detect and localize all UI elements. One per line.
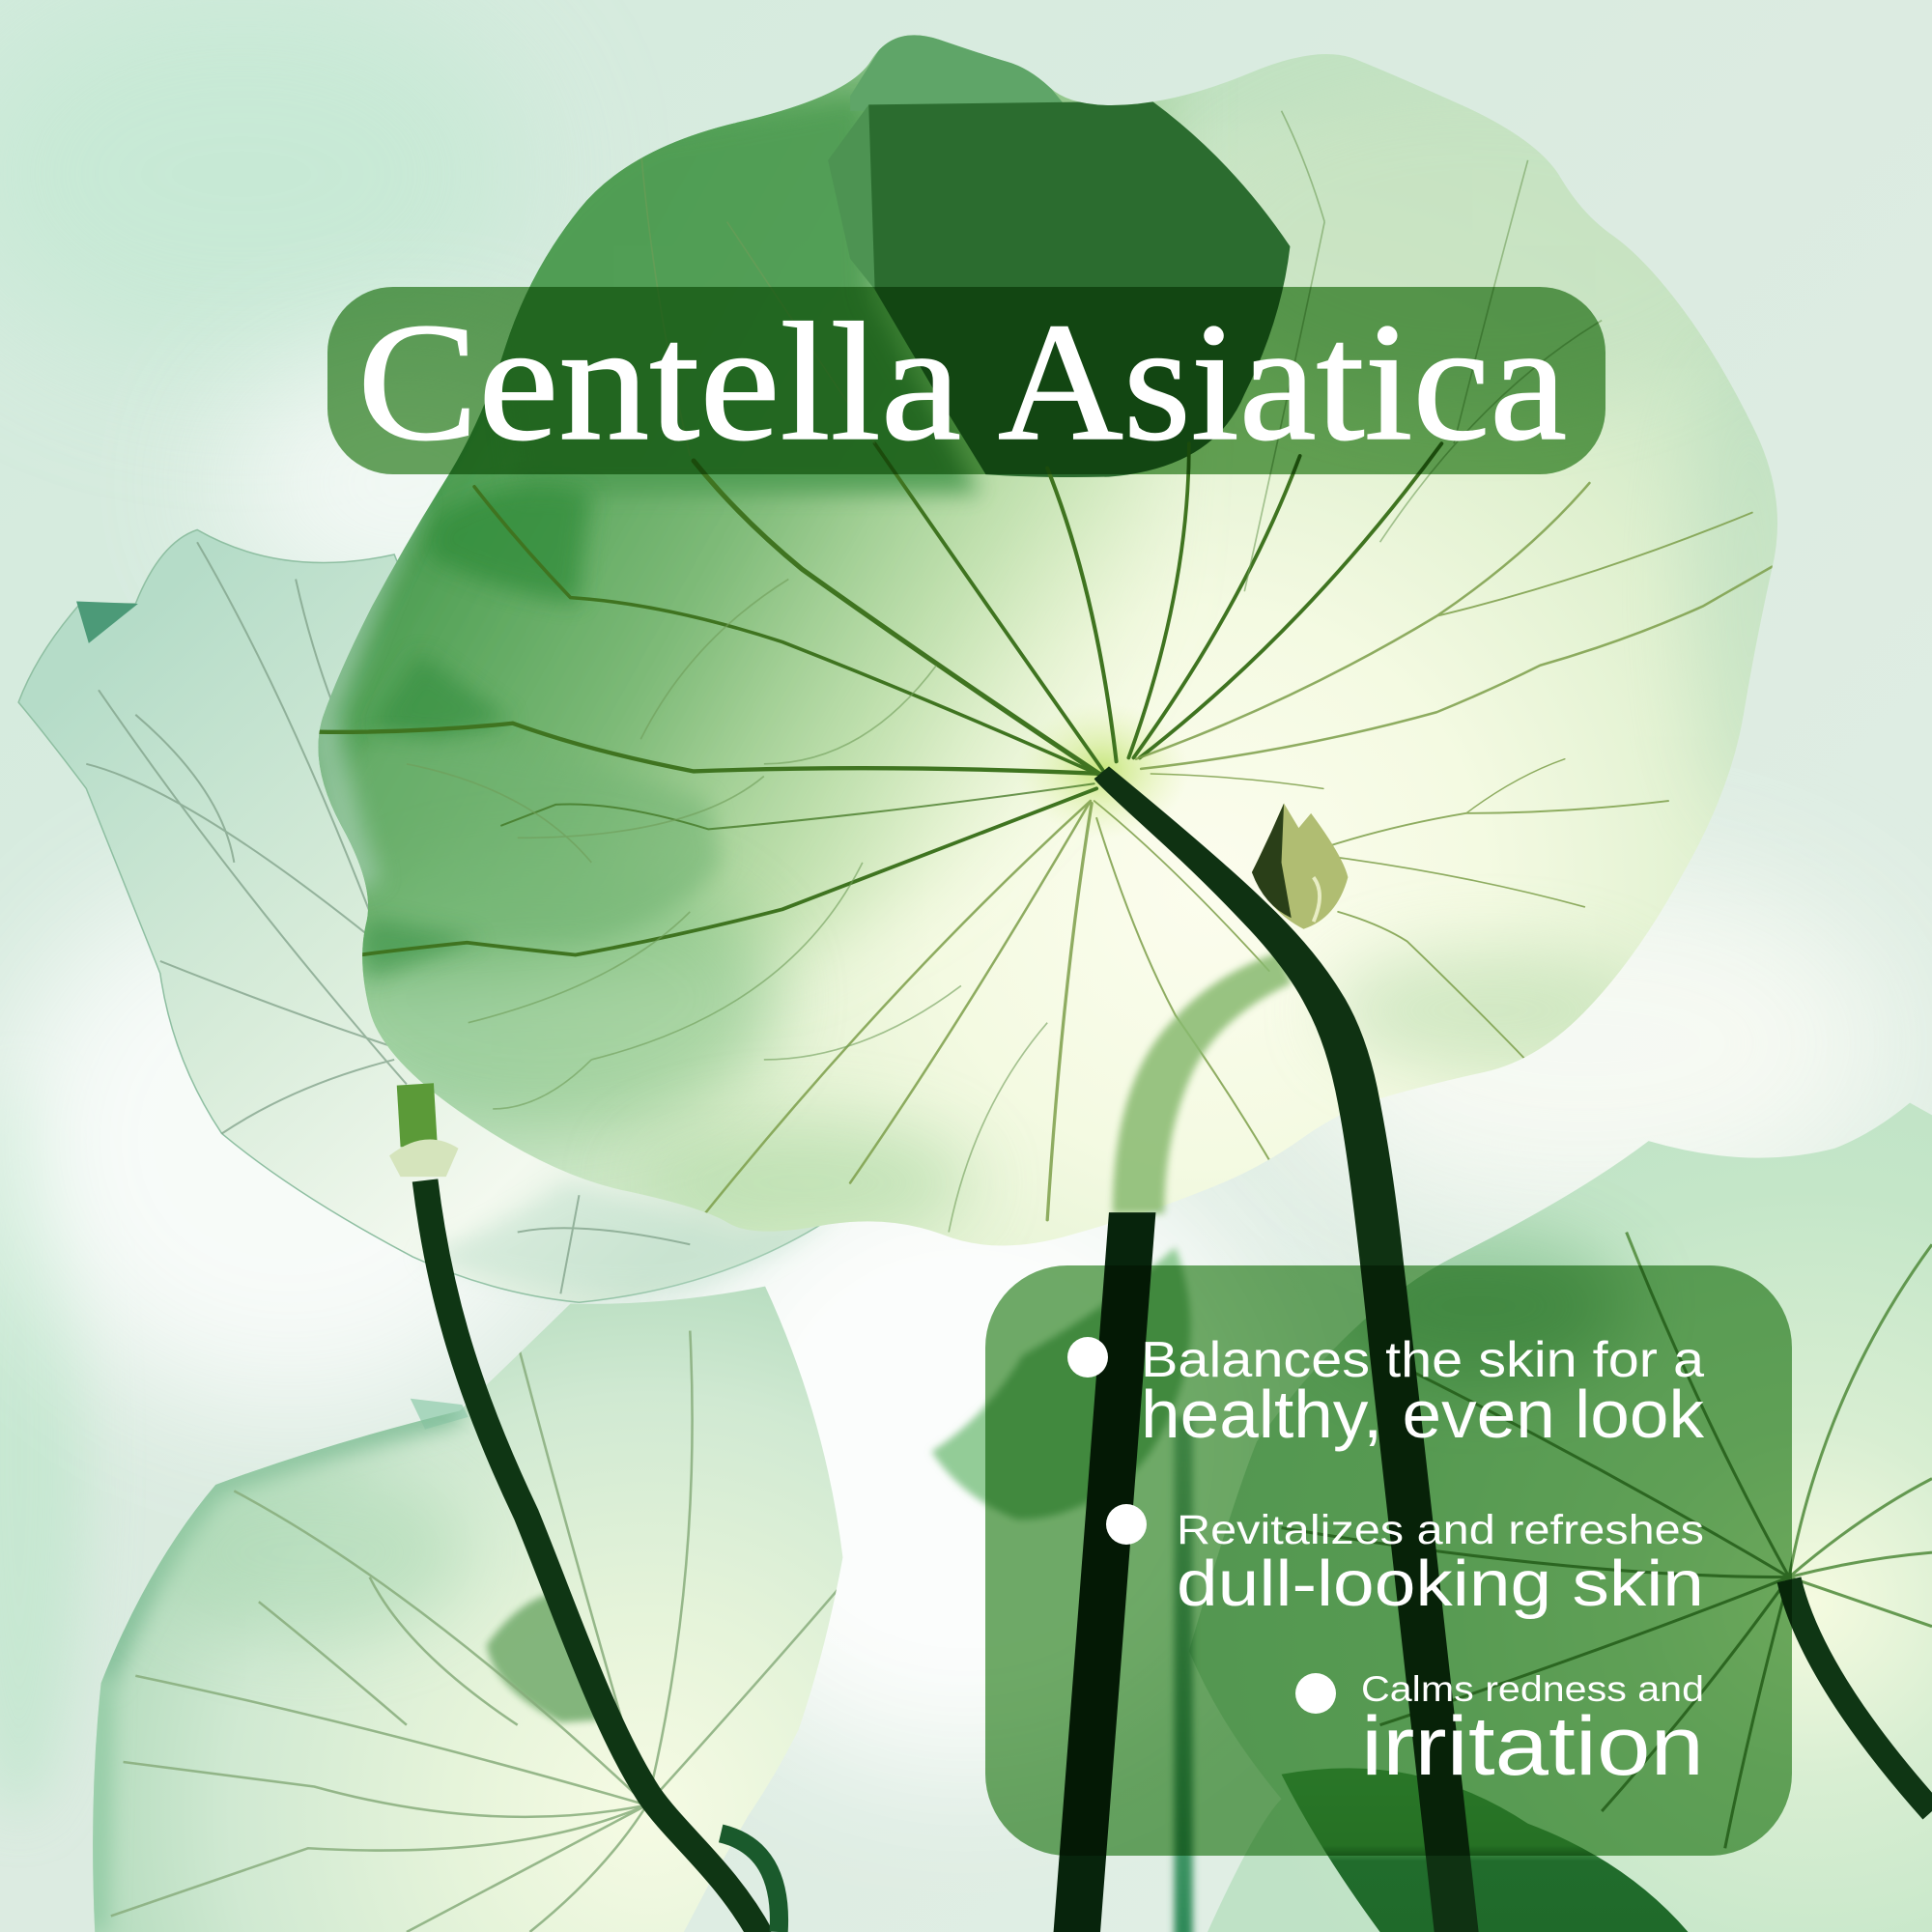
stem: thin background [1175,1417,1193,1932]
benefit 2 [1106,1504,1704,1620]
benefit 2: Revitalizes and refreshes [1177,1507,1704,1553]
stem: left [389,1084,779,1932]
benefit 1: healthy, even look [1141,1377,1705,1452]
benefit 3 [1295,1669,1704,1793]
stem: second [1054,1212,1155,1932]
benefit 1: Balances the skin for a [1141,1332,1704,1388]
leaf: small blurred leaf [931,1247,1190,1520]
stem: main [1094,766,1479,1932]
benefit 3: Calms redness and [1361,1669,1704,1709]
main veins [314,443,1441,955]
benefits panel [985,1265,1792,1856]
title text [357,288,1567,475]
leaf: bottom left [93,1287,842,1932]
title text: Centella [357,288,961,475]
stem: bottom right [1789,1579,1932,1811]
leaf: bottom right [1189,1103,1932,1932]
benefit 3: irritation [1361,1700,1704,1793]
secondary veins [407,111,1602,1233]
lower and right veins [690,483,1772,1233]
benefit 1 [1067,1332,1705,1452]
top fold and shadow [850,35,1063,110]
shading [185,49,1158,985]
stem shadow on leaf [1113,952,1292,1213]
benefit 2: dull-looking skin [1177,1548,1704,1620]
leaf: main large [319,35,1777,1246]
title band [327,287,1605,475]
leaf: left back [18,529,838,1302]
bud [1252,804,1348,929]
title text: Asiatica [998,288,1567,475]
